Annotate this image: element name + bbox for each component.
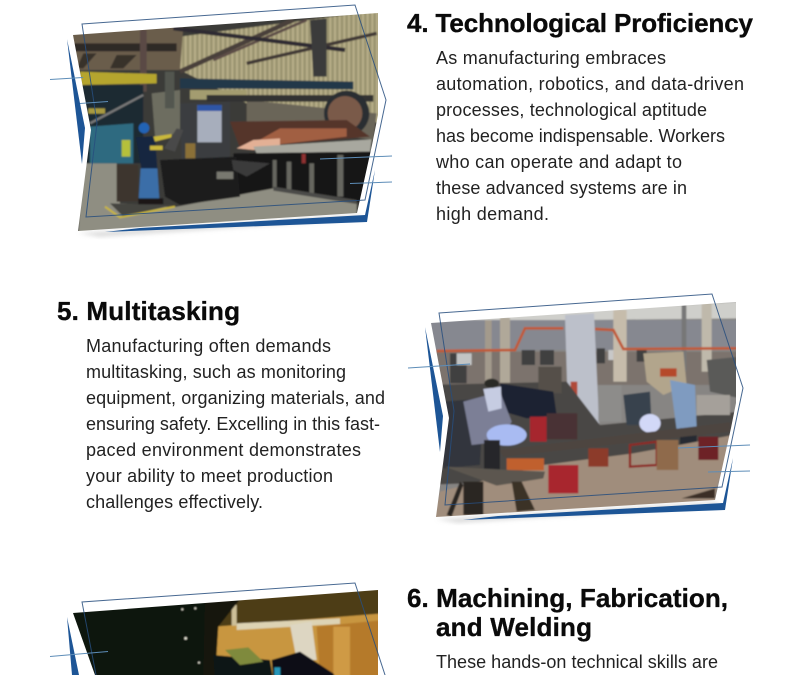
text block: skill 4 body: who can operate and adapt to [435,152,682,172]
text block: skill 5 body: Manufacturing often demands [86,336,331,356]
text block: skill 5 body: challenges effectively. [86,492,263,512]
text block: skill 4 body: has become indispensable. Workers [436,126,725,146]
thin outline frame [82,583,386,675]
welding workshop photo [427,298,747,525]
text block: skill 5 body: multitasking, such as monitoring [86,362,346,382]
text block: skill 5 body: equipment, organizing materials, and [86,388,385,408]
blue left accent [425,327,443,452]
text block: skill 4 body: high demand. [436,204,549,224]
blue left accent [67,39,85,164]
heading: 6. Machining, Fabrication, and Welding: 6. Machining, Fabrication, [407,583,728,613]
text block: skill 5 body [86,336,385,512]
text block: skill 4 body: these advanced systems are in [436,178,687,198]
thin outline frame [439,294,743,505]
text block: skill 4 body: As manufacturing embraces [436,48,666,68]
panel: skill 6 photo with frame [50,583,387,675]
thin outline frame [82,5,386,217]
heading: 5. Multitasking: 5. Multitasking [57,296,240,326]
accent lines [50,78,392,184]
text block: skill 6 body: These hands-on technical skills are [436,652,718,672]
text block: skill 5 body: ensuring safety. Excelling in this fast- [86,414,380,434]
welding close-up photo [73,590,378,675]
blue bottom accent [105,170,375,232]
text block: skill 4 body: automation, robotics, and data-driven [436,74,744,94]
text block: skill 4 body: processes, technological aptitude [436,100,707,120]
heading: 6. Machining, Fabrication, and Welding: and Welding [436,612,592,642]
heading: 4. Technological Proficiency: 4. Technological Proficiency [407,8,754,38]
text block: skill 4 body [435,48,744,224]
photo shadow [78,215,365,237]
text block: skill 5 body: your ability to meet production [86,466,333,486]
blue bottom accent [463,458,733,520]
panel: skill 4 photo with frame [50,5,392,240]
accent lines [408,364,750,472]
accent line [50,652,108,656]
photo shadow [436,502,723,523]
blue left accent [67,617,79,675]
heading: 6. Machining, Fabrication, and Welding [407,583,728,642]
text block: skill 5 body: paced environment demonstrates [86,440,361,460]
factory photo [73,13,378,231]
panel: skill 5 photo with frame [408,294,750,525]
